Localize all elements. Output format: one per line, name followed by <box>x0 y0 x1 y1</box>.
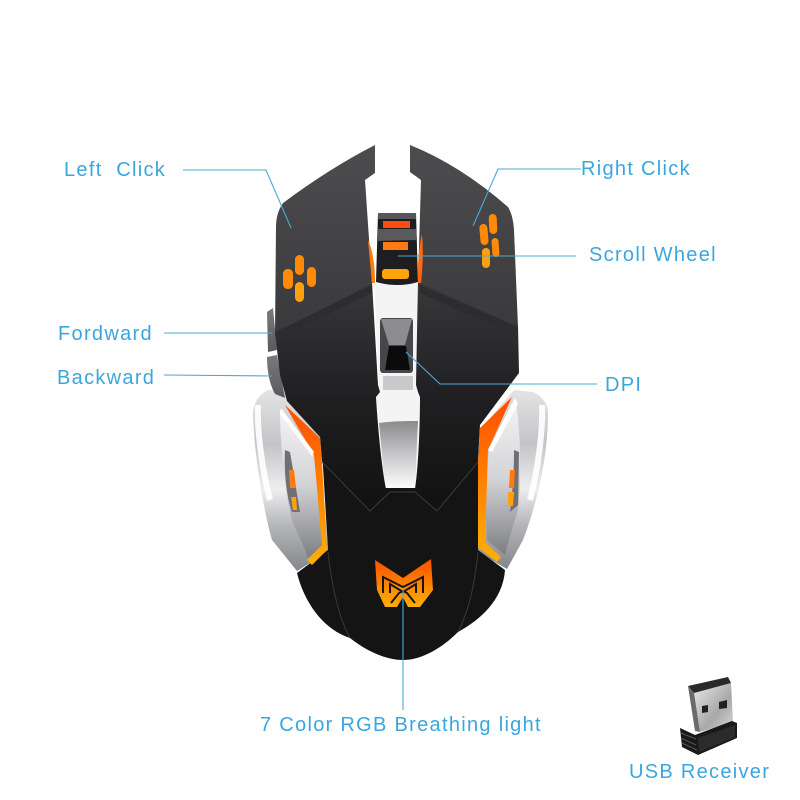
label: DPI: DPI <box>605 374 642 396</box>
label: Left Click: Left Click <box>64 159 166 181</box>
orange dots right button <box>479 214 500 268</box>
grey strip below DPI <box>383 376 413 390</box>
usb metal plug <box>694 683 733 732</box>
label: Right Click: Right Click <box>581 158 691 180</box>
right white highlight <box>488 398 518 452</box>
label: Fordward: Fordward <box>58 323 153 345</box>
palm rest <box>297 450 505 660</box>
right main body panel <box>415 281 519 510</box>
left button <box>275 145 375 335</box>
RGB logo <box>375 559 433 607</box>
DPI button <box>380 318 413 373</box>
usb housing ridges <box>681 733 697 750</box>
right silver side wing <box>478 390 548 569</box>
USB receiver <box>680 677 737 755</box>
label: Backward: Backward <box>57 367 155 389</box>
left main body panel <box>275 282 386 510</box>
right orange light strip <box>478 397 512 562</box>
usb black housing <box>680 721 737 755</box>
side button: backward <box>267 355 285 398</box>
side button: forward <box>267 308 277 352</box>
right button <box>410 145 518 327</box>
scroll wheel <box>368 213 423 285</box>
mouse illustration <box>253 145 548 660</box>
right button seam <box>420 285 518 337</box>
usb holes <box>702 700 727 713</box>
palm rest seams <box>322 462 478 638</box>
left white highlight <box>280 408 314 456</box>
label: 7 Color RGB Breathing light: 7 Color RGB Breathing light <box>260 714 542 736</box>
orange dots left button <box>283 255 316 302</box>
left silver side wing <box>253 390 328 571</box>
label: Scroll Wheel: Scroll Wheel <box>589 244 717 266</box>
usb housing front <box>698 725 735 752</box>
left orange light strip <box>285 405 327 565</box>
leader lines <box>164 169 597 710</box>
logo inner line <box>383 577 423 603</box>
silver centre channel <box>374 282 421 489</box>
left button seam <box>275 285 372 340</box>
label: USB Receiver: USB Receiver <box>629 761 770 783</box>
silver gradient centre plate <box>379 421 418 490</box>
